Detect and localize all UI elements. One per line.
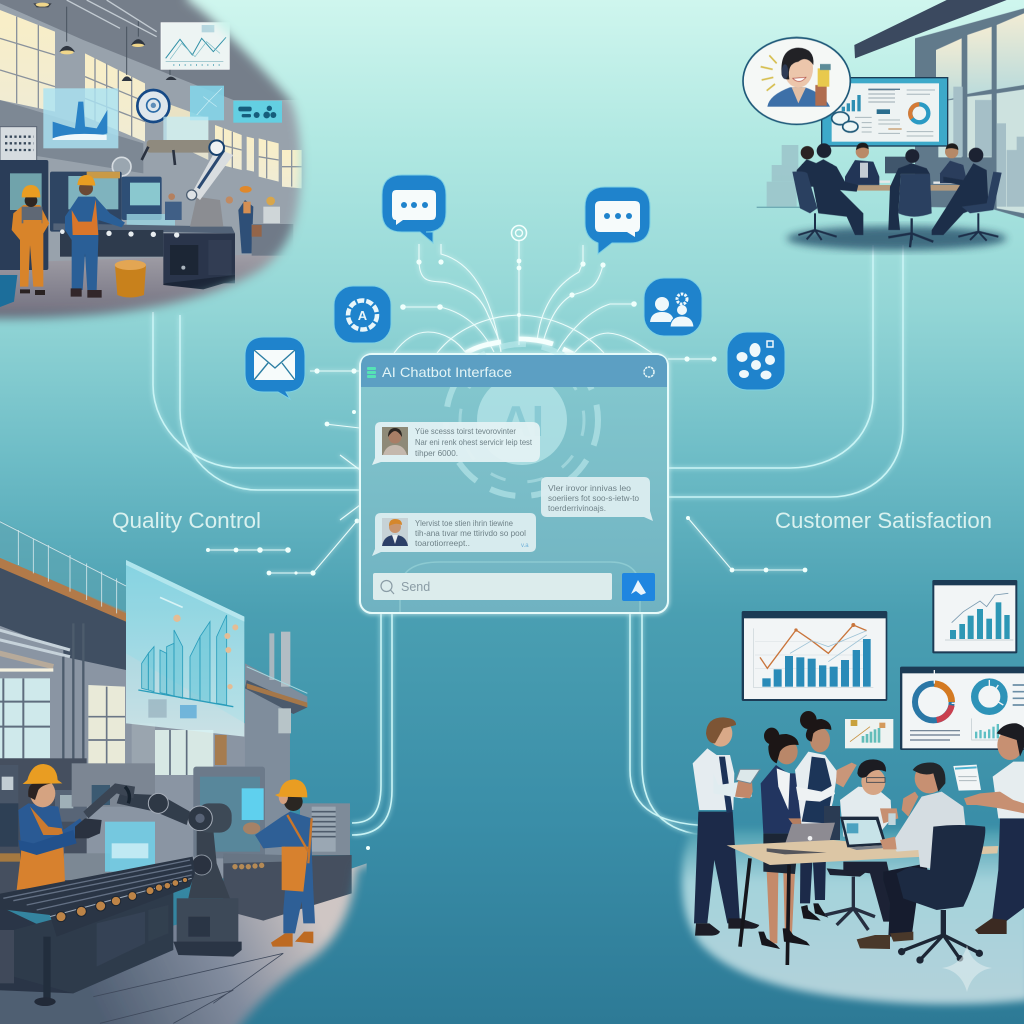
glowing arc segments above panel — [466, 339, 573, 354]
AI watermark — [446, 344, 598, 496]
window left — [0, 670, 53, 758]
watermark sparkle — [942, 945, 992, 992]
screen: donut charts — [900, 667, 1024, 750]
icon: chat bubble right — [585, 187, 650, 254]
ceiling beam — [854, 0, 1007, 58]
main building wall — [0, 626, 245, 881]
scene: factory bottom left — [0, 517, 367, 1024]
icon: header logo — [367, 367, 376, 378]
icon: settings gear — [644, 367, 654, 377]
floor — [0, 863, 367, 1024]
office chair — [897, 825, 985, 964]
executive far left — [797, 159, 817, 187]
conveyor body — [0, 903, 73, 993]
back cabinet — [223, 853, 352, 921]
left pipes — [0, 628, 70, 657]
under-deck shadow — [0, 563, 126, 670]
holographic area chart — [43, 88, 118, 148]
monitor behind table — [885, 157, 912, 173]
thought bubble outline — [743, 38, 850, 124]
window centre — [88, 685, 125, 768]
input field — [373, 562, 640, 612]
sparkle rays — [761, 55, 777, 91]
desk top — [727, 840, 998, 865]
avatar: woman — [382, 427, 408, 455]
label: Quality Control: Quality Control — [112, 508, 261, 533]
label: Customer Satisfaction: Customer Satisfaction — [775, 508, 992, 533]
message bubble 2: toerderrivinoajs. — [548, 503, 606, 513]
holographic strip — [163, 116, 208, 140]
message bubble 3: Ylervist toe stien ihrin tiewine — [415, 518, 513, 528]
robot arm — [75, 783, 242, 957]
window mullions — [0, 17, 302, 187]
wall card chart — [845, 719, 893, 748]
holographic target ring — [137, 90, 169, 122]
avatar: man — [382, 518, 408, 546]
connector network — [153, 240, 903, 836]
worker: blue overalls — [65, 175, 125, 298]
icon: envelope — [245, 337, 305, 399]
executive left back — [809, 159, 863, 235]
window lower — [132, 723, 227, 775]
icon: people and gear — [644, 278, 702, 336]
scene: factory top left — [0, 0, 307, 326]
chair behind table — [824, 806, 840, 840]
message bubble 3: tih-ana tıvar me ttirivdo so pool — [415, 528, 526, 538]
conveyor holo glow — [105, 822, 155, 872]
table — [848, 185, 972, 191]
robot arm — [142, 140, 233, 227]
holographic map panel — [190, 86, 224, 120]
AI watermark: AI — [500, 397, 544, 446]
city skyline through window — [953, 87, 1024, 207]
woman portrait — [767, 48, 831, 107]
message bubble 1 — [372, 422, 540, 465]
executive right back — [932, 163, 988, 235]
executive centre facing — [845, 160, 879, 185]
conveyor leg — [43, 937, 51, 1000]
factory floor — [0, 257, 266, 324]
floating document — [953, 765, 981, 791]
panel: chatbot window — [360, 344, 668, 613]
far right building block — [245, 632, 307, 877]
right machine — [300, 803, 350, 855]
message bubble 2: soeriiers fot soo-s-ietw-to — [548, 493, 639, 503]
icon: chat bubble left — [382, 175, 446, 243]
chair right — [962, 172, 1002, 213]
floor shadow — [787, 226, 1007, 250]
blue crate — [0, 275, 17, 308]
small background workers — [165, 186, 293, 256]
person: woman with white coat — [795, 711, 857, 921]
person: woman with navy jacket — [758, 728, 810, 949]
executive far right — [940, 161, 967, 183]
person: man from behind — [857, 763, 967, 949]
person: man with tablet — [693, 717, 760, 936]
header title: AI Chatbot Interface — [382, 364, 512, 380]
laptop: silver — [782, 823, 835, 854]
upper thin lines — [208, 240, 805, 573]
factory wall and ceiling — [0, 4, 307, 262]
person: seated man smiling — [840, 759, 898, 837]
seated executives — [797, 143, 988, 235]
small hologram near worker — [242, 788, 264, 820]
small network node icon — [512, 226, 526, 240]
person: right man talking — [964, 723, 1024, 934]
windows — [0, 10, 302, 188]
holographic blob panel — [233, 101, 282, 123]
connector dots — [206, 259, 807, 850]
ghost skyline left — [757, 145, 830, 207]
chair centre — [898, 174, 932, 217]
icon: flower cluster — [727, 332, 785, 390]
message text: Yüe scesss toirst tevorovinter — [415, 426, 516, 436]
screen: upper chart — [932, 580, 1017, 653]
deck railing and beam — [0, 517, 126, 622]
machine table and cabinet — [53, 223, 235, 289]
wall chart — [161, 23, 229, 69]
scene: analytics team bottom right — [682, 580, 1024, 1004]
background gear — [112, 157, 131, 176]
scene: boardroom top right — [743, 0, 1024, 250]
main circuit rails — [153, 245, 903, 836]
input field: Send — [401, 580, 430, 594]
chair left — [792, 171, 817, 213]
executive centre back — [888, 149, 930, 230]
ceiling pipes — [67, 0, 157, 37]
worker left — [17, 764, 87, 890]
floor glow — [682, 830, 1024, 1004]
dot board — [0, 127, 37, 162]
screen: bar and line chart — [742, 611, 887, 701]
machines — [0, 160, 175, 270]
worker right — [243, 779, 315, 947]
seated man legs and chair base — [825, 862, 900, 930]
message bubble 2 — [541, 477, 653, 521]
chairs — [792, 171, 1002, 247]
pendant lamps — [33, 3, 177, 81]
laptop silver base — [767, 848, 827, 854]
panel body — [360, 354, 668, 613]
send button — [622, 573, 655, 601]
panel header — [361, 355, 667, 387]
laptop: dark — [840, 817, 895, 850]
holographic chart panel — [126, 560, 244, 737]
message bubble 3: v.a — [521, 543, 529, 549]
thought bubble woman — [743, 38, 858, 132]
background machinery — [0, 758, 265, 898]
message text: Nar eni renk ohest servicir leip test — [415, 437, 533, 447]
vertical columns — [63, 623, 83, 773]
message bubble 3 — [372, 513, 536, 556]
desk legs — [740, 858, 789, 965]
icon: AI badge: A — [358, 308, 368, 323]
conveyor belt — [0, 857, 195, 1006]
message bubble 2: Vler irovor innivas leo — [548, 483, 631, 493]
message text: tihper 6000. — [415, 448, 458, 458]
message bubble 3: toarotiorreept.. — [415, 538, 470, 548]
windows and frame — [915, 8, 1024, 218]
orange drum — [115, 260, 146, 297]
worker: orange overalls — [12, 185, 49, 295]
thought bubble trail — [832, 112, 849, 125]
presentation screen — [822, 78, 948, 146]
icon: AI badge — [334, 286, 391, 343]
